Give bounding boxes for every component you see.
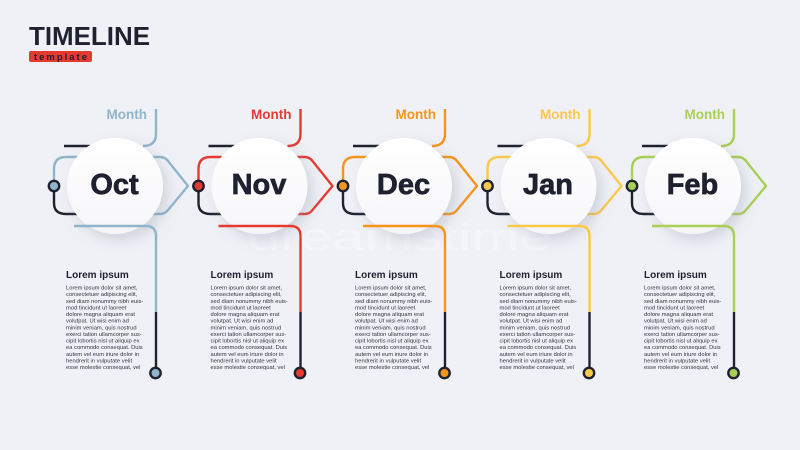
text block: Nov: cipit lobortis nisl ut aliquip ex — [210, 338, 284, 344]
text block: Oct — [66, 270, 143, 371]
text block: Oct: esse molestie consequat, vel — [66, 365, 140, 371]
text block: Jan: sed diam nonummy nibh euis- — [500, 299, 577, 305]
text block: Feb: Lorem ipsum dolor sit amet, — [644, 286, 716, 292]
text block: Feb: ea commodo consequat. Duis — [644, 345, 721, 351]
text block: Dec: volutpat. Ut wisi enim ad — [355, 319, 418, 325]
text block: Feb: volutpat. Ut wisi enim ad — [644, 319, 707, 325]
text block: Nov: dolore magna aliquam erat — [210, 312, 280, 318]
text block: Feb: esse molestie consequat, vel — [644, 365, 718, 371]
end dot: Feb — [728, 368, 739, 378]
date label: Oct: Oct — [90, 169, 139, 201]
text block: Dec: Lorem ipsum dolor sit amet, — [355, 286, 427, 292]
text block: Nov: consectetuer adipiscing elit, — [210, 292, 282, 298]
connector lines: Nov — [198, 109, 332, 368]
text block: Dec: sed diam nonummy nibh euis- — [355, 299, 432, 305]
text block: Jan: autem vel eum iriure dolor in — [500, 352, 573, 358]
text block: Jan: Lorem ipsum dolor sit amet, — [500, 286, 571, 292]
text block: Dec: autem vel eum iriure dolor in — [355, 352, 428, 358]
text block: Oct: Lorem ipsum dolor sit amet, — [66, 286, 138, 292]
text block: Nov: exerci tation ullamcorper sus- — [210, 332, 286, 338]
text block: Jan — [500, 270, 577, 371]
text block: Nov: hendrerit in vulputate velit — [210, 358, 277, 364]
text block: Feb: dolore magna aliquam erat — [644, 312, 713, 318]
text block: Jan: hendrerit in vulputate velit — [500, 358, 566, 364]
month label: Oct: Month — [107, 107, 147, 122]
text block: Dec: ea commodo consequat. Duis — [355, 345, 432, 351]
circle: Nov — [212, 138, 308, 234]
text block: Nov: Lorem ipsum dolor sit amet, — [210, 286, 282, 292]
text block: Dec: consectetuer adipiscing elit, — [355, 292, 427, 298]
column: Dec — [338, 107, 477, 378]
text block: Nov: mod tincidunt ut laoreet — [210, 305, 271, 311]
text block: Jan: dolore magna aliquam erat — [500, 312, 569, 318]
date label: Nov: Nov — [232, 169, 286, 201]
text block: Nov: ea commodo consequat. Duis — [210, 345, 287, 351]
connector lines: Feb — [632, 109, 766, 368]
column: Feb — [627, 107, 766, 378]
bottom connector: Feb — [652, 226, 734, 312]
text block: Oct: dolore magna aliquam erat — [66, 312, 135, 318]
circle: Feb — [645, 138, 741, 234]
bottom connector: Oct — [74, 226, 156, 312]
date label: Dec: Dec — [377, 169, 430, 201]
text block: Feb: mod tincidunt ut laoreet — [644, 305, 705, 311]
text block: Nov: volutpat. Ut wisi enim ad — [210, 319, 273, 325]
text block: Nov: minim veniam, quis nostrud — [210, 325, 281, 331]
watermark: dreamstime — [248, 217, 552, 259]
month label: Nov: Month — [251, 107, 292, 122]
connector lines: Jan — [488, 109, 622, 368]
circle: Oct — [67, 138, 163, 234]
text block: Feb: exerci tation ullamcorper sus- — [644, 332, 720, 338]
text block: Oct: autem vel eum iriure dolor in — [66, 352, 139, 358]
text block: Dec: Lorem ipsum — [355, 270, 418, 281]
text block: Jan: consectetuer adipiscing elit, — [500, 292, 571, 298]
end dot: Dec — [439, 368, 450, 378]
text block: Feb — [644, 270, 721, 371]
text block: Dec: cipit lobortis nisl ut aliquip ex — [355, 338, 429, 344]
text block: Oct: Lorem ipsum — [66, 270, 129, 281]
end dot: Oct — [150, 368, 161, 378]
text block: Jan: Lorem ipsum — [500, 270, 562, 281]
text block: Jan: exerci tation ullamcorper sus- — [500, 332, 575, 338]
end dot: Jan — [584, 368, 594, 378]
start dot: Dec — [338, 181, 348, 191]
start dot: Jan — [482, 181, 493, 191]
month label: Dec: Month — [396, 107, 436, 122]
text block: Jan: ea commodo consequat. Duis — [500, 345, 576, 351]
text block: Feb: autem vel eum iriure dolor in — [644, 352, 717, 358]
connector lines: Oct — [54, 109, 188, 368]
text block: Dec: mod tincidunt ut laoreet — [355, 305, 416, 311]
text block: Oct: mod tincidunt ut laoreet — [66, 305, 127, 311]
text block: Oct: cipit lobortis nisl ut aliquip ex — [66, 338, 140, 344]
text block: Oct: exerci tation ullamcorper sus- — [66, 332, 142, 338]
date label: Jan: Jan — [523, 169, 573, 201]
circle: Jan — [500, 138, 596, 234]
text block: Dec: hendrerit in vulputate velit — [355, 358, 421, 364]
text block: Feb: sed diam nonummy nibh euis- — [644, 299, 721, 305]
text block: Dec: dolore magna aliquam erat — [355, 312, 424, 318]
text block: Nov: autem vel eum iriure dolor in — [210, 352, 284, 358]
text block: Jan: minim veniam, quis nostrud — [500, 325, 570, 331]
text block: Oct: volutpat. Ut wisi enim ad — [66, 319, 129, 325]
date label: Feb: Feb — [667, 169, 718, 201]
text block: Oct: sed diam nonummy nibh euis- — [66, 299, 143, 305]
text block: Jan: mod tincidunt ut laoreet — [500, 305, 560, 311]
text block: Oct: consectetuer adipiscing elit, — [66, 292, 138, 298]
text block: Feb: minim veniam, quis nostrud — [644, 325, 715, 331]
text block: Dec: esse molestie consequat, vel — [355, 365, 429, 371]
column: Oct — [49, 107, 188, 378]
connector lines: Dec — [343, 109, 477, 368]
title: TIMELINE — [29, 21, 150, 51]
column: Jan — [482, 107, 622, 378]
text block: Feb: consectetuer adipiscing elit, — [644, 292, 716, 298]
text block: Oct: minim veniam, quis nostrud — [66, 325, 137, 331]
month label: Feb: Month — [685, 107, 725, 122]
bottom connector: Jan — [508, 226, 590, 312]
text block: Dec — [355, 270, 432, 371]
text block: Dec: exerci tation ullamcorper sus- — [355, 332, 431, 338]
circle: Dec — [356, 138, 452, 234]
month label: Jan: Month — [540, 107, 580, 122]
subtitle badge: template — [34, 52, 87, 63]
start dot: Nov — [193, 181, 204, 191]
text block: Jan: volutpat. Ut wisi enim ad — [500, 319, 562, 325]
text block: Feb: hendrerit in vulputate velit — [644, 358, 710, 364]
text block: Nov — [210, 270, 288, 371]
text block: Oct: ea commodo consequat. Duis — [66, 345, 143, 351]
text block: Oct: hendrerit in vulputate velit — [66, 358, 132, 364]
end dot: Nov — [295, 368, 305, 378]
start dot: Oct — [49, 181, 59, 191]
start dot: Feb — [627, 181, 637, 191]
text block: Nov: esse molestie consequat, vel — [210, 365, 285, 371]
text block: Feb: Lorem ipsum — [644, 270, 707, 281]
text block: Jan: cipit lobortis nisl ut aliquip ex — [500, 338, 573, 344]
text block: Feb: cipit lobortis nisl ut aliquip ex — [644, 338, 718, 344]
column: Nov — [193, 107, 332, 378]
text block: Dec: minim veniam, quis nostrud — [355, 325, 426, 331]
bottom connector: Dec — [363, 226, 445, 312]
text block: Nov: sed diam nonummy nibh euis- — [210, 299, 288, 305]
text block: Jan: esse molestie consequat, vel — [500, 365, 574, 371]
text block: Nov: Lorem ipsum — [210, 270, 273, 281]
bottom connector: Nov — [218, 226, 300, 312]
